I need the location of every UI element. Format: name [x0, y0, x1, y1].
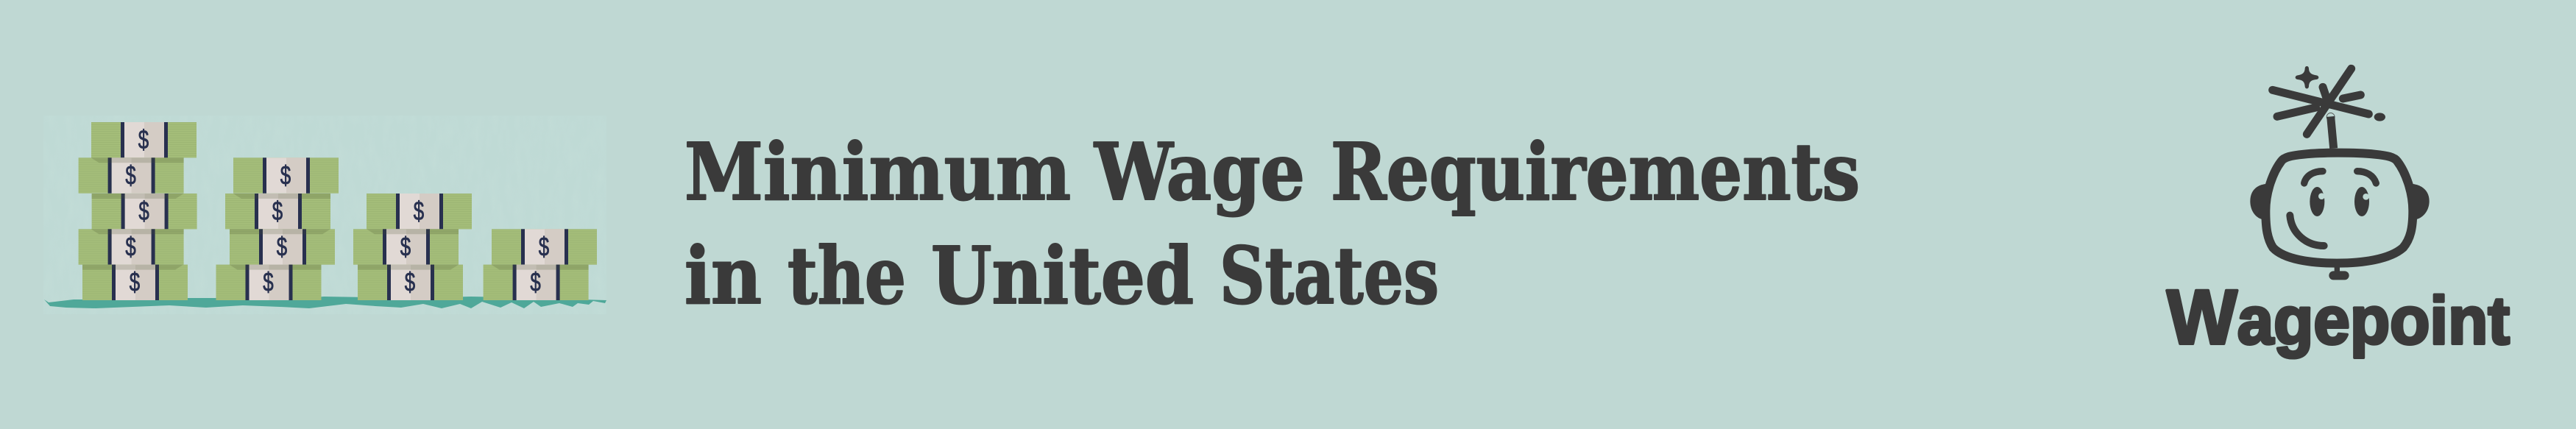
stack 3: $ [414, 196, 424, 226]
title [684, 127, 1860, 322]
stack 1: $ [138, 196, 149, 226]
stack 4 [484, 229, 597, 300]
stack 1: $ [125, 232, 136, 261]
smile [2290, 216, 2324, 246]
stack 1: $ [125, 160, 136, 190]
logo: Wagepoint [2167, 66, 2510, 361]
title line 2: States [1220, 230, 1439, 322]
title line 1 [684, 127, 1860, 219]
title line 2: in [684, 230, 762, 322]
title line 2 [684, 230, 1439, 322]
ears [2250, 184, 2430, 220]
icon: robot mascot [2250, 66, 2430, 280]
stack 2: $ [263, 267, 274, 297]
stack 2 [216, 157, 339, 300]
head [2265, 153, 2413, 263]
illustration: stacks of cash [43, 116, 606, 314]
title line 1: Requirements [1331, 127, 1860, 219]
title line 2: United [931, 230, 1194, 322]
stack 1: $ [130, 267, 140, 297]
stack 3: $ [405, 267, 415, 297]
stack 3 [353, 194, 472, 300]
eyes [2310, 187, 2369, 216]
stack 3: $ [400, 232, 411, 261]
eyebrows [2304, 171, 2376, 183]
title line 2: the [788, 230, 906, 322]
stack 1: $ [138, 125, 149, 155]
ground brush stroke [44, 297, 606, 308]
star [2296, 66, 2318, 88]
antenna and sparks [2273, 68, 2368, 149]
stack 4: $ [539, 232, 549, 261]
title line 1: Minimum [684, 127, 1071, 219]
stack 2: $ [280, 160, 291, 190]
stack 1 [79, 122, 197, 300]
neck and foot [2329, 265, 2349, 280]
spark dot [2374, 113, 2385, 121]
wordmark: Wagepoint [2167, 274, 2510, 361]
stack 2: $ [277, 232, 287, 261]
title line 1: Wage [1094, 127, 1305, 219]
stack 2: $ [272, 196, 283, 226]
stack 4: $ [530, 267, 541, 297]
texture panel [43, 116, 606, 314]
